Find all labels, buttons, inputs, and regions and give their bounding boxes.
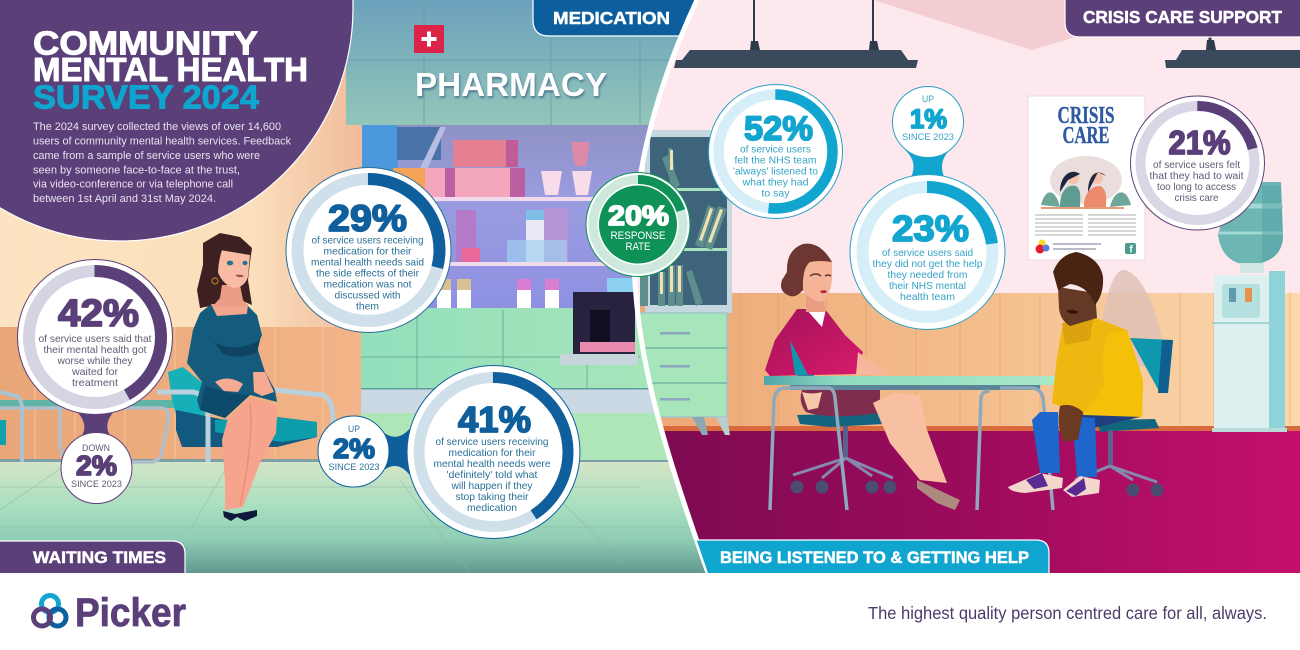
person: man at desk	[1008, 252, 1143, 497]
figure: 52%	[744, 110, 813, 148]
description: of service users said	[882, 248, 973, 259]
description: medication was not	[324, 280, 412, 290]
desk legs	[770, 388, 1053, 510]
stat: 29% side effects	[286, 168, 451, 332]
description: discussed with	[334, 290, 401, 302]
stat: up 1% since 2023: UP	[922, 94, 934, 105]
shelf boards	[432, 197, 594, 201]
stat: down 2% since 2023: 2%	[76, 450, 117, 481]
description: worse while they	[57, 356, 133, 367]
lamp: left ceiling light	[674, 0, 918, 68]
binders	[640, 148, 727, 306]
hands	[215, 378, 243, 392]
stat: up 2% since 2023: UP	[348, 424, 360, 435]
skirt	[801, 390, 880, 416]
shelves	[650, 188, 727, 191]
poster text lines	[1035, 215, 1136, 235]
stat: down 2% since 2023: SINCE 2023	[71, 479, 122, 490]
description: they needed from	[888, 270, 968, 281]
description: of service users said that	[38, 334, 152, 345]
heading: SURVEY 2024	[33, 78, 260, 116]
description: to say	[762, 189, 790, 200]
figure: 21%	[1168, 124, 1230, 161]
wall	[0, 67, 362, 327]
heading: COMMUNITY	[33, 24, 258, 62]
icon: pharmacy cross	[414, 25, 444, 53]
person: seated woman	[187, 233, 277, 521]
heading: MENTAL HEALTH	[33, 51, 308, 88]
shoes	[223, 510, 257, 521]
description	[733, 145, 818, 200]
section tab: waiting times	[0, 541, 185, 575]
waiting chair	[157, 367, 333, 462]
bottles	[526, 220, 544, 262]
icon: Picker logo rings	[34, 596, 66, 626]
stat: up 2% since 2023	[318, 416, 412, 487]
curved panel divider	[634, 0, 708, 573]
section tab: waiting times: WAITING TIMES	[33, 548, 166, 567]
figure: 20%	[608, 200, 669, 231]
description: treatment	[72, 378, 118, 389]
section tab: being listened to and getting help: BEING LISTENED TO & GETTING HELP	[720, 548, 1029, 567]
hands	[1059, 405, 1083, 442]
pharmacy sign lettering: PHARMACY	[415, 66, 607, 103]
wainscot wall	[640, 293, 1300, 427]
chest	[211, 304, 248, 316]
intro text: users of community mental health services. Feedback	[33, 136, 291, 148]
description: crisis care	[1174, 193, 1219, 204]
ceiling	[873, 0, 1110, 50]
medication section tab	[533, 0, 700, 36]
low table	[0, 400, 175, 408]
far left chair	[0, 392, 22, 462]
stat: up 2% since 2023: SINCE 2023	[328, 462, 380, 473]
description: too long to access	[1157, 182, 1236, 193]
hair	[781, 244, 832, 296]
monitor	[573, 292, 635, 354]
description: RATE	[626, 241, 650, 253]
footer	[0, 573, 1300, 650]
description: felt the NHS team	[734, 156, 816, 167]
intro text: seen by someone face-to-face at the trust,	[33, 164, 240, 176]
Picker wordmark: Picker	[75, 591, 186, 635]
drawers	[637, 313, 727, 417]
hand	[802, 392, 822, 410]
description: their NHS mental	[889, 281, 966, 292]
shoe	[917, 480, 960, 510]
lamp: right ceiling light	[1165, 36, 1300, 68]
description	[311, 236, 424, 312]
description: 'definitely' told what	[446, 470, 538, 481]
poster: crisis care	[1028, 96, 1145, 260]
panel: waiting room and pharmacy background	[0, 0, 720, 573]
intro text: between 1st April and 31st May 2024.	[33, 193, 216, 205]
heading	[33, 24, 308, 116]
shelves back	[392, 125, 649, 308]
man's chair	[1075, 338, 1173, 496]
figure: 41%	[458, 399, 531, 440]
intro text: via video-conference or via telephone call	[33, 179, 233, 191]
poster heading: CRISIS	[1058, 103, 1114, 129]
wainscot	[0, 327, 362, 461]
jeans	[1070, 397, 1140, 428]
figure: 42%	[58, 293, 139, 335]
stat: 42% worse while waiting	[18, 260, 172, 440]
stat: 41% definitely told	[407, 366, 580, 538]
description: that they had to wait	[1150, 171, 1244, 182]
wall shadow behind man	[1098, 270, 1167, 367]
feet	[692, 417, 708, 435]
sweater	[765, 309, 863, 376]
stat: up 2% since 2023: 2%	[333, 433, 375, 464]
description: medication for their	[448, 448, 536, 459]
description	[38, 334, 152, 389]
description: of service users receiving	[312, 236, 424, 246]
description	[434, 437, 551, 514]
dress	[187, 305, 277, 418]
description: waited for	[71, 367, 119, 378]
person: woman at desk	[765, 244, 960, 510]
description: medication	[467, 503, 517, 514]
stat: up 1% since 2023	[892, 86, 964, 187]
water cooler	[1212, 182, 1287, 432]
description: of service users	[740, 145, 811, 156]
description: medication for their	[324, 246, 412, 258]
description	[1150, 160, 1244, 204]
face	[217, 250, 250, 288]
taps	[1222, 284, 1260, 318]
intro text: came from a sample of service users who were	[33, 150, 260, 162]
description: will happen if they	[451, 481, 533, 492]
sneakers	[1008, 473, 1063, 493]
stat: 20% response rate	[586, 172, 690, 276]
description: the side effects of their	[316, 268, 420, 280]
poster illustration	[1041, 156, 1131, 209]
stat: up 1% since 2023: 1%	[910, 104, 947, 134]
legs	[222, 398, 277, 510]
section tab: being listened to and getting help	[696, 540, 1049, 575]
sweater	[1052, 317, 1143, 417]
stat: 52% listened to	[708, 84, 842, 218]
description: their mental health got	[44, 345, 147, 356]
eyes and lips	[227, 261, 233, 265]
stat: down 2% since 2023: DOWN	[82, 443, 110, 454]
description: stop taking their	[456, 492, 529, 503]
intro text: The 2024 survey collected the views of over 14,600	[33, 121, 281, 133]
description: them	[356, 302, 379, 312]
description: of service users felt	[1153, 160, 1240, 171]
desk scene: woman's chair	[790, 340, 896, 494]
intro text	[33, 121, 291, 205]
section tab: crisis care support	[1065, 0, 1300, 37]
desk	[764, 376, 1063, 510]
cabinet body	[1214, 275, 1270, 430]
floor	[0, 462, 720, 573]
figure: 23%	[892, 208, 969, 249]
poster logo and social icon	[1036, 240, 1136, 256]
description: health team	[900, 292, 955, 303]
description	[610, 230, 666, 253]
boxes	[453, 140, 506, 167]
figure: 29%	[328, 198, 407, 239]
fringe	[210, 234, 252, 275]
stat: 23% did not get help	[850, 174, 1005, 330]
description: RESPONSE	[610, 230, 666, 242]
stat: down 2% since 2023	[61, 432, 132, 504]
stat: up 1% since 2023: SINCE 2023	[902, 132, 954, 143]
medication section tab: MEDICATION	[553, 8, 670, 28]
counter	[361, 308, 648, 388]
face	[1058, 287, 1097, 326]
description: mental health needs were	[434, 459, 551, 470]
facial features	[810, 274, 831, 276]
description: of service users receiving	[436, 437, 549, 448]
poster heading: CARE	[1062, 123, 1110, 149]
bottle	[1218, 182, 1283, 265]
filing cabinet	[637, 130, 732, 435]
back hair	[197, 233, 252, 308]
description: what they had	[741, 178, 809, 189]
neck and face	[806, 295, 826, 312]
leg	[873, 393, 947, 483]
description: mental health needs said	[311, 258, 424, 268]
stat: 21% waited too long	[1130, 96, 1264, 230]
floor	[640, 431, 1300, 573]
title panel	[0, 0, 353, 241]
hair	[1053, 252, 1103, 305]
section tab: crisis care support: CRISIS CARE SUPPORT	[1083, 7, 1282, 27]
description	[872, 248, 983, 303]
poster logo and social icon: f	[1129, 244, 1133, 256]
neck	[213, 285, 248, 306]
description: they did not get the help	[872, 259, 983, 270]
tagline: The highest quality person centred care for all, always.	[868, 603, 1267, 623]
poster heading	[1058, 103, 1114, 149]
pharmacy sign panel	[346, 0, 706, 125]
description: 'always' listened to	[733, 167, 818, 178]
waiting area furniture	[0, 392, 175, 462]
